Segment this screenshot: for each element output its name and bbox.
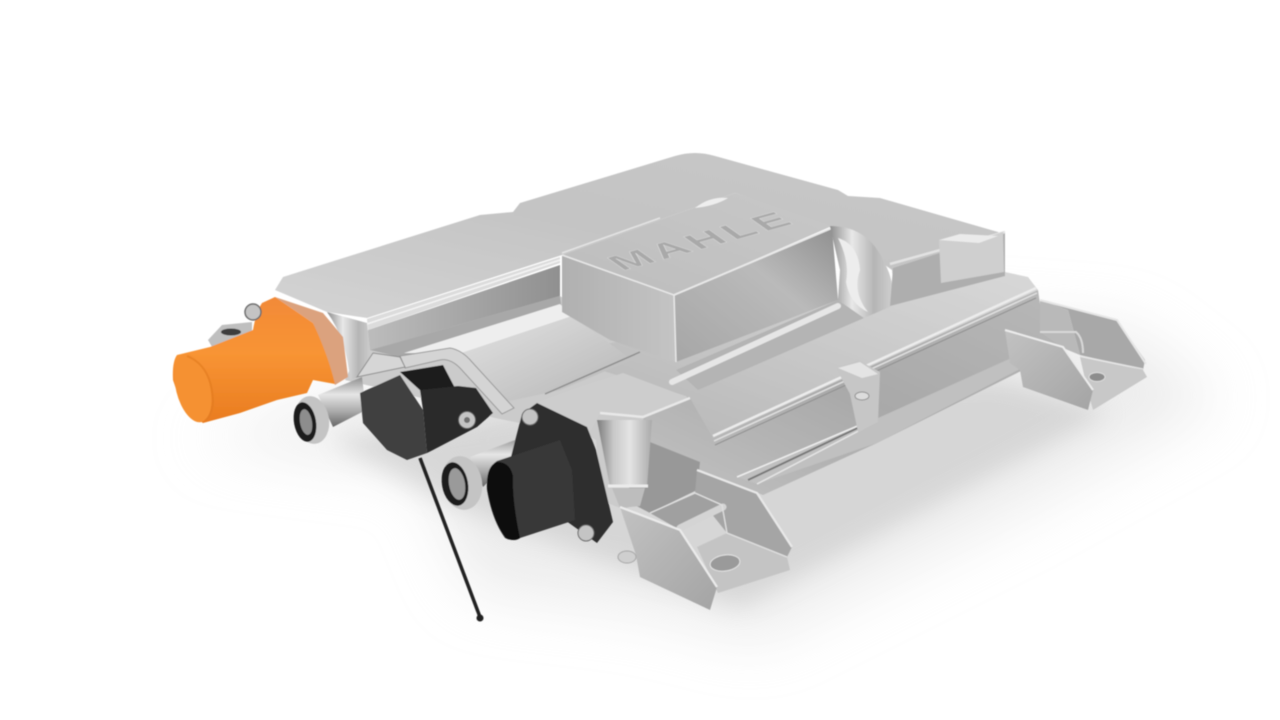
metal tube behind sensor: [400, 348, 514, 414]
lower pipe: [438, 437, 540, 513]
plate edge lines: [713, 288, 1036, 436]
corner boss: [939, 232, 1004, 283]
housing: [168, 153, 1147, 622]
channel wall under wing: [368, 265, 560, 350]
side tab: [836, 360, 880, 432]
top cover: [275, 153, 1005, 318]
sensor wire: [420, 458, 484, 622]
orange connector: [168, 297, 335, 426]
bellows: [357, 353, 405, 377]
lower rib: [737, 355, 1022, 484]
upper pipe: [291, 377, 366, 447]
front end block top: [538, 373, 687, 432]
curved pillar: [830, 226, 893, 318]
post stem: [612, 488, 645, 508]
cover highlight line: [562, 218, 660, 253]
wing end collar: [327, 312, 372, 380]
ground shadow: [190, 300, 1220, 640]
front bracket: [618, 470, 792, 610]
embossed logo: MAHLE: [600, 207, 804, 275]
shiny corner post: [597, 420, 652, 487]
copper flange: [275, 297, 348, 385]
cover step wall: [890, 232, 1005, 306]
front block shadow: [625, 440, 700, 513]
wing lip: [367, 257, 560, 330]
metal clamp behind connector: [208, 322, 252, 352]
black sensor: [360, 365, 493, 460]
groove along top plate: [676, 300, 864, 390]
black connector: [487, 403, 613, 543]
raised block right face: [674, 228, 838, 362]
right bracket: [1005, 300, 1147, 410]
dark gap behind channel: [370, 296, 562, 358]
plate side wall: [643, 290, 1063, 495]
raised block left face: [562, 255, 676, 362]
silver base behind pipes: [345, 296, 690, 510]
front plate second level: [600, 272, 1038, 438]
bright band: [404, 304, 572, 354]
floor panel: [455, 316, 632, 402]
raised block top: [562, 193, 832, 295]
logo highlight: [695, 198, 728, 208]
cover edge lip: [890, 232, 1005, 264]
